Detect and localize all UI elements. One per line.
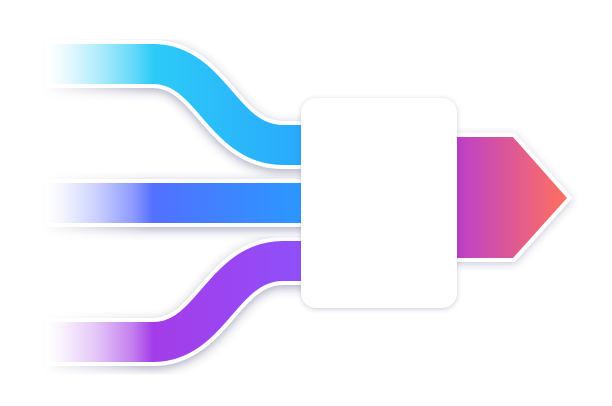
stream: bottom purple (46, 261, 310, 342)
card: central box (301, 98, 457, 308)
stream: middle blue (46, 179, 310, 227)
stream: top cyan (46, 64, 310, 145)
diagram: three streams merging into a card with an output arrow (54, 40, 574, 374)
arrow: output (440, 137, 567, 258)
